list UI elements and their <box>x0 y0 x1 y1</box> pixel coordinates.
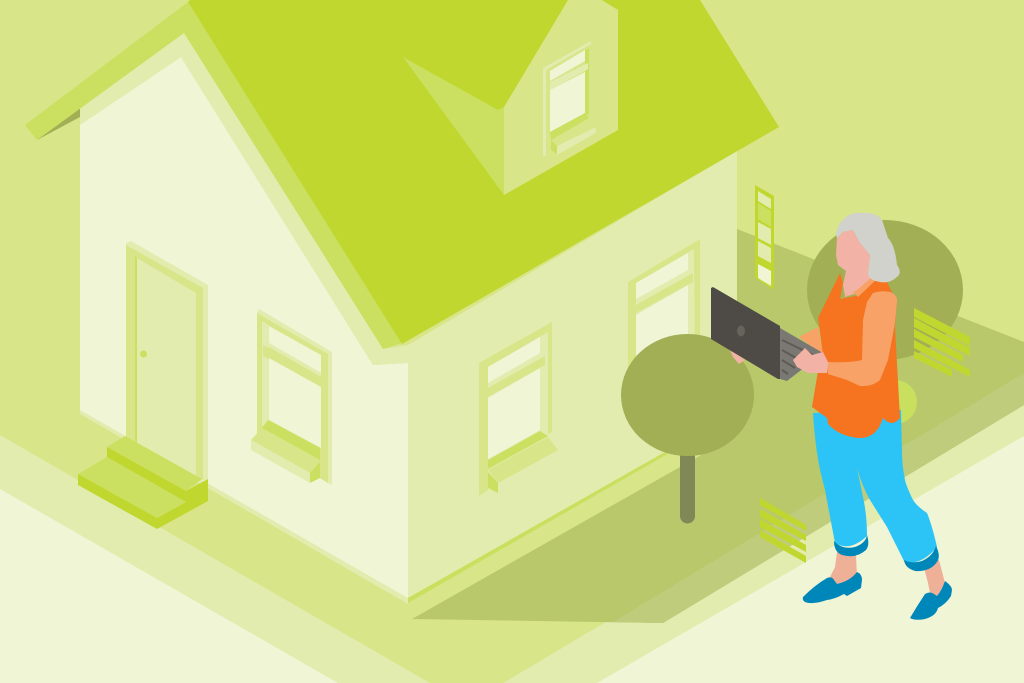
door <box>126 241 208 482</box>
tree: front <box>621 334 754 524</box>
ground: yard shadow <box>412 229 1024 623</box>
woman <box>711 213 952 620</box>
house <box>25 0 779 604</box>
roof underside shadow <box>37 108 80 140</box>
roof edge <box>25 2 402 349</box>
laptop keyboard <box>780 328 823 381</box>
pants <box>813 410 937 562</box>
neck and face <box>836 230 872 297</box>
ladder pattern <box>755 185 774 290</box>
wall base line <box>408 411 737 603</box>
tree: back <box>807 220 963 360</box>
cuffs <box>834 535 868 556</box>
ground: right pavement <box>493 373 1024 683</box>
right wall <box>408 151 737 598</box>
steps <box>78 436 208 529</box>
hair <box>836 213 900 282</box>
base strip under front wall <box>80 408 408 604</box>
ground: left pavement <box>0 435 430 683</box>
hand far <box>730 350 745 364</box>
door knob <box>140 350 147 358</box>
bush <box>873 380 917 424</box>
side wall window one <box>479 322 558 496</box>
dormer shadow <box>403 57 504 195</box>
hand near <box>793 348 828 373</box>
fascia <box>80 33 408 365</box>
stripes right <box>914 308 970 377</box>
arm far <box>799 327 823 353</box>
front wall window <box>251 309 332 485</box>
roof <box>188 0 779 344</box>
stripes bottom <box>760 498 806 563</box>
dormer wall <box>504 0 618 195</box>
shoes <box>803 572 862 603</box>
lower legs <box>830 552 857 585</box>
shirt <box>812 273 900 438</box>
arm near <box>827 291 897 386</box>
front wall <box>80 57 408 598</box>
collar <box>841 277 878 299</box>
laptop lid <box>711 287 780 379</box>
side wall window two <box>628 239 700 387</box>
dormer window <box>543 41 596 157</box>
